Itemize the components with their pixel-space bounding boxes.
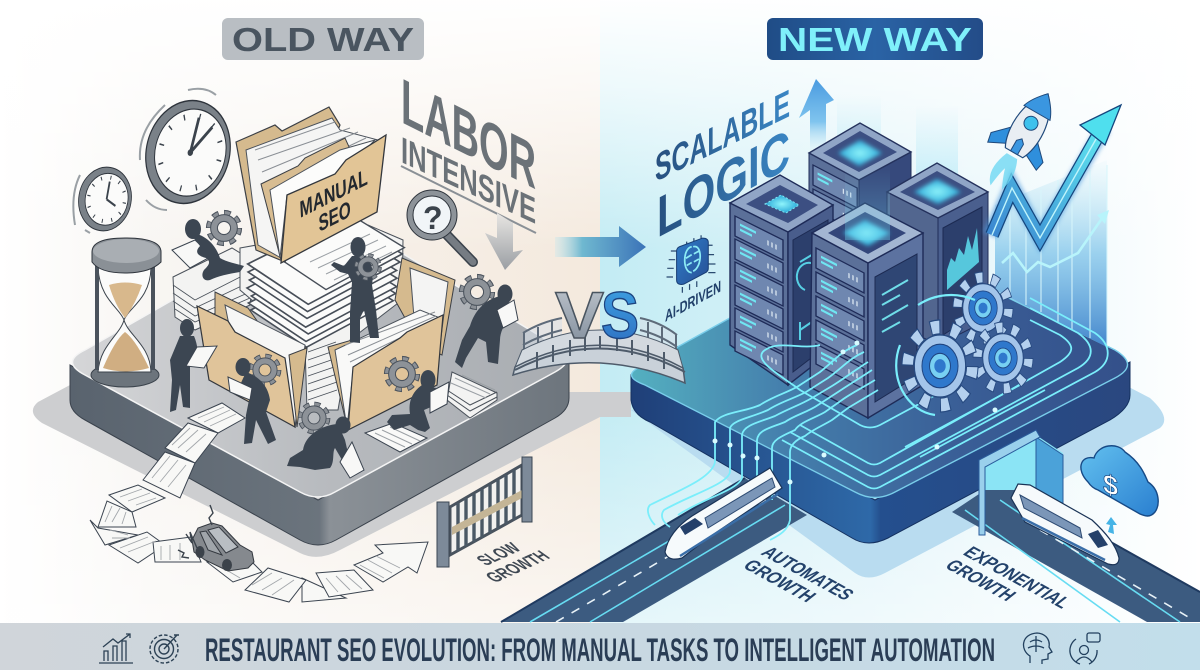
- label: EXPONENTIAL GROWTH: EXPONENTIAL: [959, 543, 1076, 612]
- clock: large: [135, 91, 241, 213]
- VS mark: [555, 278, 639, 352]
- worker: kneeling with gear: [172, 214, 244, 280]
- label: LABOR INTENSIVE: INTENSIVE: [401, 130, 536, 233]
- server rack: back: [809, 123, 911, 310]
- train: left: [665, 468, 782, 559]
- label: SCALABLE LOGIC: [655, 81, 790, 250]
- icon: money cloud: [1081, 446, 1158, 534]
- background: new way side: [600, 0, 1200, 624]
- label: LABOR INTENSIVE: LABOR: [401, 65, 536, 204]
- motion arcs around clocks: [73, 89, 216, 233]
- light beams: [837, 95, 958, 195]
- road: right track: [952, 480, 1200, 622]
- label: AUTOMATES GROWTH: AUTOMATES: [757, 543, 859, 603]
- server rack: left: [730, 175, 833, 385]
- worker: crawling: [287, 406, 364, 478]
- circuit traces: [648, 298, 1108, 540]
- label: EXPONENTIAL GROWTH: [941, 543, 1076, 612]
- magnifier: question: [407, 190, 473, 262]
- door: portal: [979, 430, 1063, 535]
- chart: rising bars behind arrow: [995, 160, 1107, 347]
- icon: person chat: [1070, 633, 1100, 664]
- trace nodes: [712, 340, 998, 484]
- folder: front left: [197, 292, 307, 427]
- badge: NEW WAY: [767, 18, 983, 60]
- central beam: [845, 165, 890, 240]
- label: AUTOMATES GROWTH: [739, 543, 859, 605]
- folder: Manual SEO: MANUAL: [299, 164, 368, 224]
- gears: automation cluster: [896, 277, 1028, 415]
- worker: standing with paper: [170, 319, 217, 412]
- icon: rocket: [968, 79, 1074, 202]
- footer banner: [0, 623, 1200, 670]
- folder: Manual SEO: [236, 107, 386, 263]
- arrow: labor down: [485, 213, 523, 270]
- gate: slow growth barrier: [437, 457, 532, 567]
- label: AI-DRIVEN: AI-DRIVEN: [665, 276, 721, 326]
- icon: money cloud: $: [1103, 468, 1118, 502]
- train: right: [1011, 484, 1119, 565]
- badge: OLD WAY: [222, 18, 424, 60]
- clock: small: [74, 163, 136, 235]
- worker: kneeling right: [387, 360, 449, 432]
- icon: target gear: [150, 635, 179, 663]
- stack: center paper pile: [240, 217, 404, 410]
- sheet under kneeling worker: [365, 423, 427, 452]
- label: EXPONENTIAL GROWTH: GROWTH: [941, 556, 1021, 604]
- arrow: scalable up: [799, 79, 834, 150]
- worker: standing on stack: [331, 237, 379, 343]
- label: SLOW GROWTH: [471, 539, 555, 586]
- icon: stalled car: [178, 505, 254, 571]
- new way platform: [631, 235, 1130, 543]
- icon: AI chip: [667, 235, 715, 293]
- worker: walking right with book: [455, 278, 518, 368]
- folder: front right: [328, 310, 443, 430]
- label: SCALABLE LOGIC: LOGIC: [657, 116, 790, 250]
- bridge: [513, 318, 685, 383]
- worker: carrying book: [228, 358, 277, 444]
- VS mark: V: [555, 278, 604, 352]
- icon: brain head: [1024, 633, 1052, 664]
- label: SLOW GROWTH: GROWTH: [480, 547, 555, 586]
- background: old way side: [0, 0, 600, 624]
- magnifier: question: ?: [423, 200, 443, 236]
- badge: NEW WAY: NEW WAY: [778, 21, 972, 58]
- folder: Manual SEO: SEO: [318, 196, 351, 238]
- server rack: front: [810, 203, 923, 418]
- paper pile right: [447, 372, 497, 418]
- server rack: right: [887, 163, 988, 345]
- label: SLOW GROWTH: SLOW: [471, 539, 526, 569]
- ground shadow: old platform: [33, 385, 631, 557]
- icon: growth chart: [99, 634, 133, 663]
- badge: OLD WAY: OLD WAY: [232, 21, 414, 58]
- VS mark: S: [601, 278, 639, 352]
- paper trail: [90, 403, 428, 602]
- line: secondary growth: [1002, 210, 1109, 272]
- ground shadow: new platform: [631, 385, 1164, 578]
- arrow: old to new: [555, 226, 646, 267]
- label: SCALABLE LOGIC: SCALABLE: [655, 81, 790, 191]
- label: LABOR INTENSIVE: [401, 65, 536, 233]
- hourglass: [91, 238, 161, 387]
- road: left track: [501, 478, 807, 622]
- arrow: exponential growth: [990, 105, 1121, 238]
- folder: right back: [395, 258, 455, 355]
- label: AUTOMATES GROWTH: GROWTH: [739, 556, 821, 605]
- old way platform: [70, 210, 569, 545]
- stack: left paper pile: [173, 248, 255, 330]
